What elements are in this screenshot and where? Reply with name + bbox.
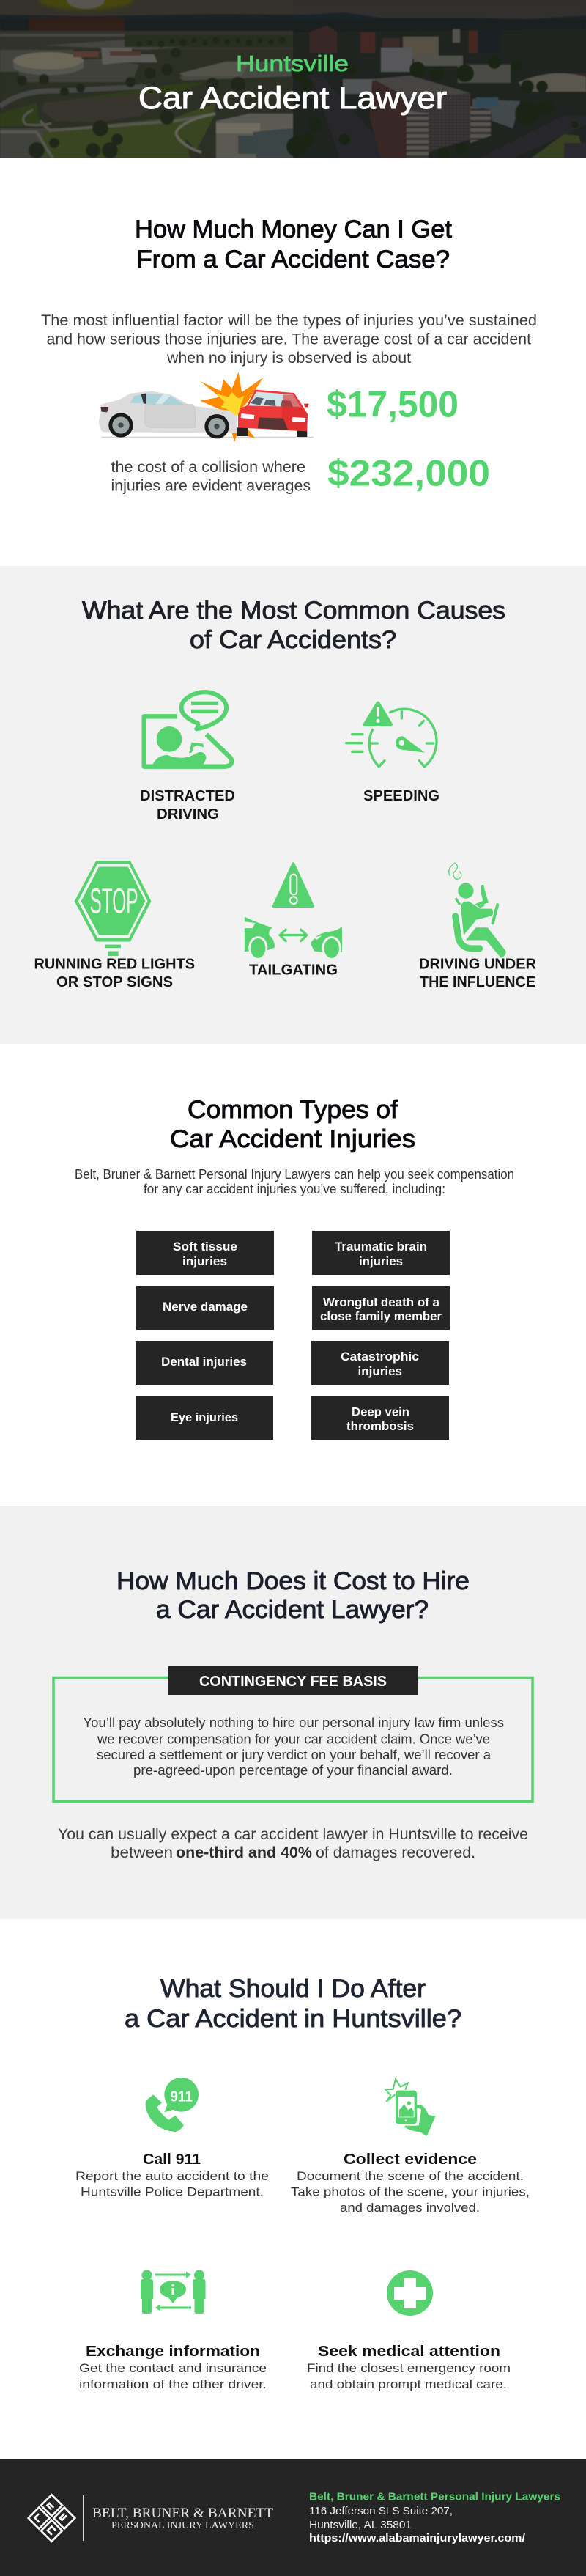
step: call 911: Call 911 — [143, 2152, 201, 2168]
label: distracted driving: DRIVING — [157, 806, 219, 823]
right road and lawn — [480, 116, 586, 158]
callout: contingency fee box: pre-agreed-upon percentage of your financial award. — [133, 1763, 453, 1778]
label: red lights: OR STOP SIGNS — [56, 974, 173, 990]
label: driving under the influence: THE INFLUENCE — [420, 974, 535, 990]
main road — [311, 77, 396, 158]
label: red lights — [34, 956, 195, 990]
contact details: 116 Jefferson St S Suite 207, — [309, 2505, 453, 2517]
box: wrongful death: close family member — [320, 1309, 442, 1323]
intro text: and how serious those injuries are. The average cost of a car accident — [47, 331, 531, 347]
label: speeding: SPEEDING — [363, 788, 440, 804]
logo: BELT, BRUNER & BARNETT — [92, 2506, 273, 2521]
label: driving under the influence: DRIVING UNDER — [419, 956, 537, 972]
icon: call 911: 911 — [170, 2088, 193, 2105]
box: traumatic brain injuries: Traumatic brain — [335, 1240, 427, 1254]
panel: hero header — [0, 0, 586, 161]
distant buildings right — [310, 26, 337, 53]
panel: how much money — [0, 158, 586, 566]
step: seek medical attention — [307, 2344, 511, 2391]
panel: injury types — [0, 1044, 586, 1506]
step: call 911: Huntsville Police Department. — [81, 2185, 264, 2199]
step: collect evidence: Take photos of the scene, your injuries, — [291, 2185, 530, 2199]
box: soft tissue injuries: injuries — [182, 1254, 227, 1268]
intro text: for any car accident injuries you’ve suffered, including: — [144, 1182, 445, 1196]
contact details — [309, 2491, 560, 2544]
intro text: The most influential factor will be the types of injuries you’ve sustained — [41, 312, 537, 329]
heading: Common Types of — [188, 1096, 398, 1124]
panel: what to do — [0, 1919, 586, 2459]
panel: cost to hire — [0, 1506, 586, 1919]
step: collect evidence — [291, 2152, 530, 2215]
callout: contingency fee box: CONTINGENCY FEE BASIS — [199, 1674, 387, 1690]
intro text: Belt, Bruner & Barnett Personal Injury Lawyers can help you seek compensation — [75, 1167, 514, 1182]
logo — [29, 2495, 273, 2542]
box: eye injuries — [136, 1396, 273, 1440]
callout: contingency fee box: secured a settlement or jury verdict on your behalf, we’ll recover a — [97, 1748, 492, 1762]
box: catastrophic injuries: injuries — [357, 1364, 402, 1378]
icon: distracted driving — [144, 692, 231, 767]
step: exchange information: Get the contact and insurance — [79, 2361, 267, 2375]
contact details: https://www.alabamainjurylawyer.com/ — [309, 2532, 526, 2544]
heading — [135, 216, 453, 273]
step: collect evidence: Collect evidence — [344, 2152, 477, 2168]
pond — [41, 92, 160, 122]
intro text: when no injury is observed is about — [166, 350, 411, 367]
heading: How Much Does it Cost to Hire — [116, 1567, 470, 1595]
callout: contingency fee box: You’ll pay absolutely nothing to hire our personal injury law firm unless — [84, 1715, 504, 1730]
text: cost of a collision: injuries are evident averages — [111, 478, 311, 494]
step: call 911: Report the auto accident to the — [75, 2169, 269, 2183]
step: exchange information — [79, 2344, 267, 2391]
stat: $232,000: $232,000 — [327, 453, 490, 494]
box: traumatic brain injuries — [312, 1231, 450, 1275]
contact details: Huntsville, AL 35801 — [309, 2519, 412, 2531]
text: expected fee: of damages recovered. — [316, 1844, 475, 1861]
label: distracted driving — [140, 788, 235, 823]
left ground — [0, 50, 293, 158]
box: deep vein thrombosis: thrombosis — [346, 1419, 414, 1433]
title: Huntsville — [236, 51, 349, 76]
panel: footer — [0, 2459, 586, 2576]
contact details: Belt, Bruner & Barnett Personal Injury Lawyers — [309, 2491, 560, 2503]
heading — [116, 1567, 470, 1624]
logo mark — [29, 2495, 75, 2542]
label: driving under the influence — [419, 956, 537, 990]
step: seek medical attention: and obtain prompt medical care. — [310, 2377, 507, 2391]
icon: stop sign — [75, 861, 152, 956]
box: deep vein thrombosis: Deep vein — [352, 1405, 409, 1419]
heading: What Should I Do After — [160, 1975, 426, 2003]
arena — [15, 59, 139, 82]
label: distracted driving: DISTRACTED — [140, 788, 235, 804]
heading: What Are the Most Common Causes — [82, 597, 505, 625]
heading: How Much Money Can I Get — [135, 216, 453, 243]
stat: $17,500: $17,500 — [327, 384, 459, 425]
title: Car Accident Lawyer — [138, 81, 447, 116]
step: exchange information: Exchange information — [86, 2344, 260, 2360]
illustration: car crash — [99, 372, 314, 442]
park lawns and trees — [51, 83, 205, 104]
icon: driving under the influence — [449, 863, 506, 958]
box: nerve damage: Nerve damage — [163, 1300, 248, 1314]
label: tailgating: TAILGATING — [249, 962, 338, 978]
text: expected fee — [58, 1826, 528, 1861]
logo: PERSONAL INJURY LAWYERS — [111, 2520, 254, 2531]
icon: medical cross — [387, 2270, 433, 2316]
text: expected fee: between — [111, 1844, 173, 1861]
text: cost of a collision — [111, 459, 311, 494]
label: red lights: RUNNING RED LIGHTS — [34, 956, 195, 972]
icon: speeding — [346, 703, 437, 767]
intro text — [75, 1167, 514, 1196]
heading: Car Accident Injuries — [170, 1125, 415, 1153]
step: call 911 — [75, 2152, 269, 2199]
heading — [170, 1096, 415, 1153]
box: catastrophic injuries: Catastrophic — [341, 1350, 419, 1364]
icon: collect evidence — [385, 2079, 436, 2136]
icon: exchange information — [141, 2270, 205, 2314]
step: collect evidence: Document the scene of the accident. — [297, 2169, 524, 2183]
hero aerial city photo — [0, 0, 586, 161]
box: wrongful death: Wrongful death of a — [323, 1295, 440, 1309]
heading: of Car Accidents? — [190, 626, 396, 654]
box: eye injuries: Eye injuries — [171, 1410, 238, 1424]
box: traumatic brain injuries: injuries — [359, 1254, 403, 1268]
icon: call 911 — [146, 2078, 199, 2131]
heading: a Car Accident Lawyer? — [156, 1596, 429, 1624]
box: soft tissue injuries — [136, 1231, 274, 1275]
step: collect evidence: and damages involved. — [340, 2201, 480, 2215]
box: soft tissue injuries: Soft tissue — [173, 1240, 237, 1254]
callout: contingency fee box — [53, 1666, 533, 1802]
step: seek medical attention: Seek medical attention — [318, 2344, 500, 2360]
box: wrongful death — [312, 1286, 450, 1330]
step: seek medical attention: Find the closest emergency room — [307, 2361, 511, 2375]
heading: a Car Accident in Huntsville? — [125, 2005, 461, 2033]
box: nerve damage — [136, 1286, 274, 1330]
text: expected fee: You can usually expect a car accident lawyer in Huntsville to receive — [58, 1826, 528, 1843]
heading: From a Car Accident Case? — [136, 246, 450, 273]
icon: tailgating — [245, 864, 342, 959]
icon: stop sign: STOP — [89, 882, 138, 921]
box: catastrophic injuries — [311, 1341, 449, 1385]
white building at center — [216, 114, 293, 158]
box: dental injuries — [136, 1341, 273, 1385]
box: deep vein thrombosis — [311, 1396, 449, 1440]
box: dental injuries: Dental injuries — [161, 1355, 247, 1369]
callout: contingency fee box: we recover compensation for your car accident claim. Once we’ve — [97, 1732, 490, 1746]
text: cost of a collision: the cost of a collision where — [111, 459, 305, 476]
main hotel building — [370, 76, 470, 158]
panel: common causes — [0, 566, 586, 1044]
heading — [82, 597, 505, 654]
heading — [125, 1975, 461, 2033]
intro text — [41, 312, 537, 367]
text: expected fee: one-third and 40% — [176, 1844, 312, 1861]
step: exchange information: information of the other driver. — [79, 2377, 267, 2391]
title — [138, 51, 447, 116]
